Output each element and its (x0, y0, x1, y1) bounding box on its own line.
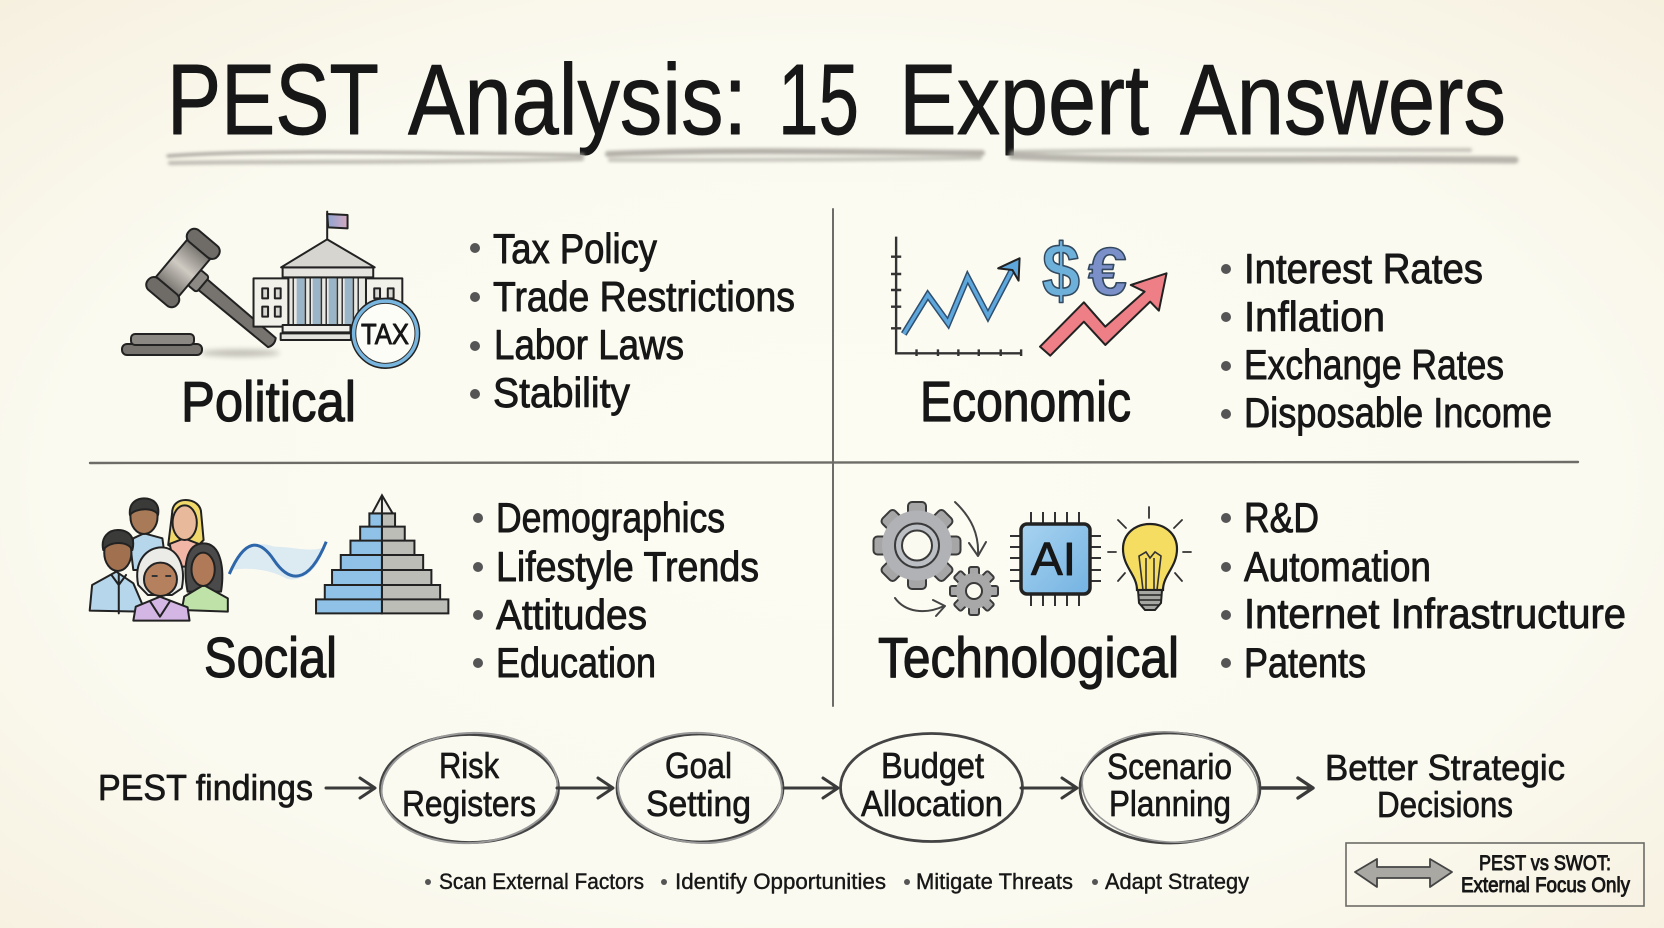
outcome: better strategic decisions: Decisions (1377, 784, 1513, 825)
step: goal setting (615, 729, 785, 847)
icon: gavel and capitol with tax badge (122, 212, 419, 374)
arrow: findings to risk registers (326, 778, 375, 798)
step: risk registers (379, 728, 560, 848)
icon: charts with currency: $ (1042, 229, 1080, 314)
list: political factors: Labor Laws (494, 321, 684, 368)
step: budget allocation: Allocation (861, 783, 1003, 824)
list: social factors: Demographics (496, 494, 725, 541)
step: scenario planning: Planning (1109, 783, 1231, 824)
title: Expert (899, 44, 1149, 156)
panel: technological (874, 494, 1626, 690)
label: PEST findings: PEST findings (98, 767, 313, 808)
list: political factors: Trade Restrictions (493, 273, 795, 320)
list: technological factors (1221, 494, 1626, 686)
icon: gears, AI chip and light bulb: AI (1031, 533, 1076, 585)
title: Analysis: (408, 44, 747, 156)
list: economic factors: Inflation (1244, 293, 1385, 340)
list: social factors (473, 494, 759, 686)
bullet row: key actions: Identify Opportunities (675, 869, 886, 894)
list: social factors: Attitudes (496, 591, 647, 638)
bullet row: key actions (425, 869, 1249, 894)
list: economic factors: Interest Rates (1244, 245, 1483, 292)
list: political factors (470, 225, 795, 416)
process flow (98, 726, 1565, 848)
bullet row: key actions: Adapt Strategy (1105, 869, 1249, 894)
arrow: goal setting to budget allocation (784, 778, 838, 798)
arrow: risk registers to goal setting (557, 778, 613, 798)
list: political factors: Stability (493, 369, 630, 416)
arrow: scenario planning to decisions (1262, 778, 1313, 798)
callout: PEST vs SWOT: External Focus Only (1461, 874, 1630, 897)
callout: PEST vs SWOT (1346, 843, 1644, 906)
callout: PEST vs SWOT: PEST vs SWOT: (1479, 852, 1611, 875)
heading: social: Social (204, 626, 337, 690)
step: risk registers: Risk (439, 745, 500, 786)
title (167, 44, 1506, 156)
step: budget allocation: Budget (881, 745, 984, 786)
title: Answers (1180, 44, 1506, 156)
list: technological factors: Automation (1244, 543, 1431, 590)
step: scenario planning (1078, 726, 1262, 848)
icon: charts with currency: € (1088, 234, 1127, 310)
list: social factors: Lifestyle Trends (496, 543, 759, 590)
panel: social (90, 494, 759, 690)
list: economic factors (1221, 245, 1552, 436)
icon: charts with currency (891, 229, 1167, 356)
icon: people, wave and population pyramid (90, 495, 448, 621)
list: economic factors: Exchange Rates (1244, 341, 1504, 388)
icon: gears, AI chip and light bulb (874, 502, 1191, 616)
step: risk registers: Registers (402, 783, 536, 824)
bullet row: key actions: Mitigate Threats (916, 869, 1073, 894)
bullet row: key actions: Scan External Factors (439, 869, 644, 894)
panel: political (122, 212, 795, 434)
heading: economic: Economic (920, 370, 1131, 434)
outcome: better strategic decisions: Better Strategic (1325, 747, 1565, 788)
heading: technological: Technological (878, 626, 1179, 690)
step: scenario planning: Scenario (1107, 746, 1232, 787)
icon: double arrow (1355, 859, 1452, 887)
title: 15 (778, 44, 859, 156)
list: technological factors: Patents (1244, 639, 1366, 686)
list: technological factors: R&D (1244, 494, 1319, 541)
list: economic factors: Disposable Income (1244, 389, 1552, 436)
panel: economic (891, 229, 1552, 436)
list: technological factors: Internet Infrastructure (1244, 590, 1626, 637)
arrow: budget allocation to scenario planning (1021, 778, 1077, 798)
panel: political: TAX (361, 319, 409, 351)
outcome: better strategic decisions (1325, 747, 1565, 825)
step: goal setting: Goal (665, 745, 732, 786)
title: PEST (167, 44, 379, 156)
step: goal setting: Setting (646, 783, 751, 824)
list: social factors: Education (496, 639, 656, 686)
heading: political: Political (181, 370, 356, 434)
step: budget allocation (840, 734, 1022, 842)
list: political factors: Tax Policy (493, 225, 657, 272)
